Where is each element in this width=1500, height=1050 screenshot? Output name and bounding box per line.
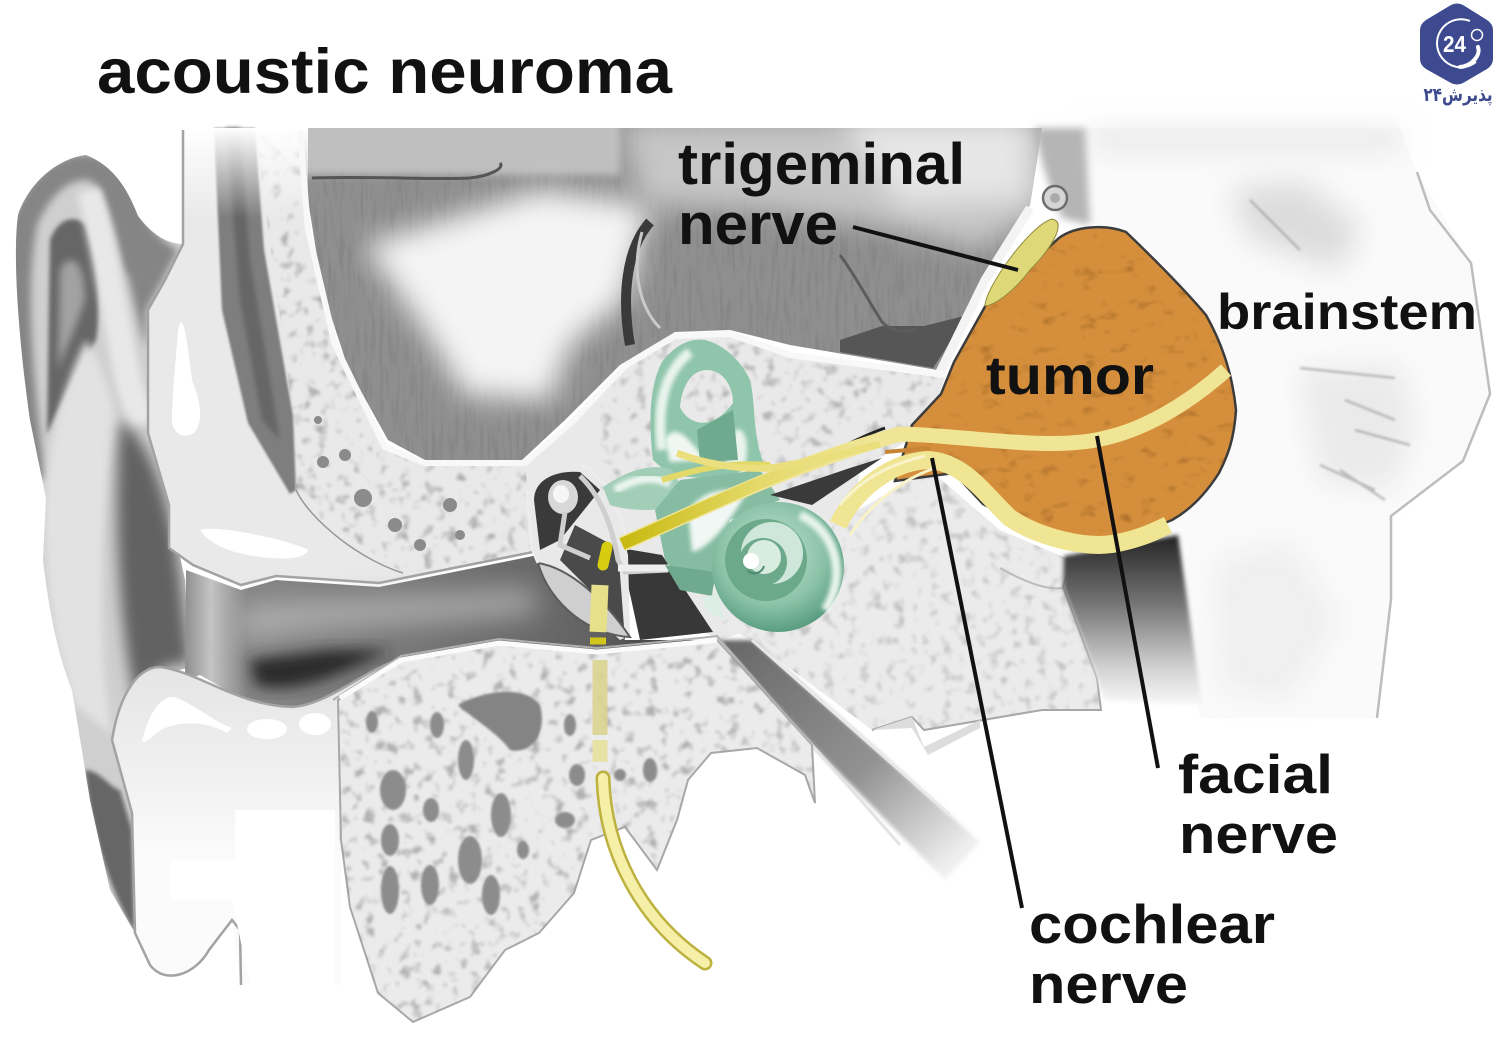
ridge highlight: [90, 190, 142, 425]
white lens: [200, 529, 308, 558]
label: trigeminal nerve: trigeminal: [678, 132, 965, 197]
logo hexagon: [1420, 4, 1493, 84]
mastoid lower bone: [333, 636, 818, 1025]
vestibular nerve descending segment: [600, 660, 705, 963]
label: cochlear nerve: cochlear: [1029, 893, 1275, 955]
trigeminal white sheath: [940, 208, 1030, 372]
white teardrop: [172, 322, 200, 436]
logo: 24 badge: [1420, 4, 1493, 107]
concha: [117, 420, 190, 700]
label: brainstem: brainstem: [1217, 284, 1477, 340]
dark channel below tumor: [1063, 535, 1202, 705]
cartilage lower left: [112, 660, 401, 985]
temporal muscle: [214, 128, 296, 494]
logo target dot: [1472, 30, 1482, 40]
pointer: trigeminal: [853, 227, 1018, 270]
mastoid air cells: [366, 692, 657, 915]
label: trigeminal nerve: nerve: [678, 192, 838, 257]
brainstem: [1080, 128, 1490, 718]
scapha hollow: [47, 219, 99, 435]
logo phone handset: [1460, 47, 1479, 67]
label: facial nerve: nerve: [1179, 803, 1338, 865]
label: tumor: tumor: [986, 346, 1154, 406]
title: acoustic neuroma: [97, 37, 673, 107]
pointer: cochlear nerve: [932, 458, 1022, 908]
vessel: [1035, 128, 1090, 225]
facial nerve: [622, 370, 1226, 544]
antihelix: [45, 340, 118, 735]
cochlear nerve: [838, 448, 1168, 545]
logo ring: [1437, 19, 1476, 67]
dark wedge between nerves: [770, 458, 882, 505]
logo wordmark: پذیرش۲۴: [1423, 84, 1493, 107]
outer ear: [16, 155, 190, 933]
earlobe shadow: [85, 770, 135, 933]
skull bone upper: [148, 128, 945, 640]
internal carotid band: [717, 640, 980, 880]
brain temporal lobe: [300, 120, 1090, 468]
label: cochlear nerve: nerve: [1029, 953, 1188, 1015]
petrous bone right: [720, 470, 1202, 740]
bone pores upper: [314, 416, 465, 551]
tumor: [895, 225, 1240, 545]
ear canal: [185, 555, 700, 710]
logo number: 24: [1443, 31, 1466, 57]
trigeminal nerve: [985, 219, 1058, 306]
pointer: facial nerve: [1097, 436, 1158, 768]
inner ear: semicircular canals and cochlea: [603, 340, 844, 632]
label: facial nerve: facial: [1178, 743, 1333, 805]
helix rim: [18, 167, 140, 480]
middle ear ossicles: [527, 464, 713, 641]
